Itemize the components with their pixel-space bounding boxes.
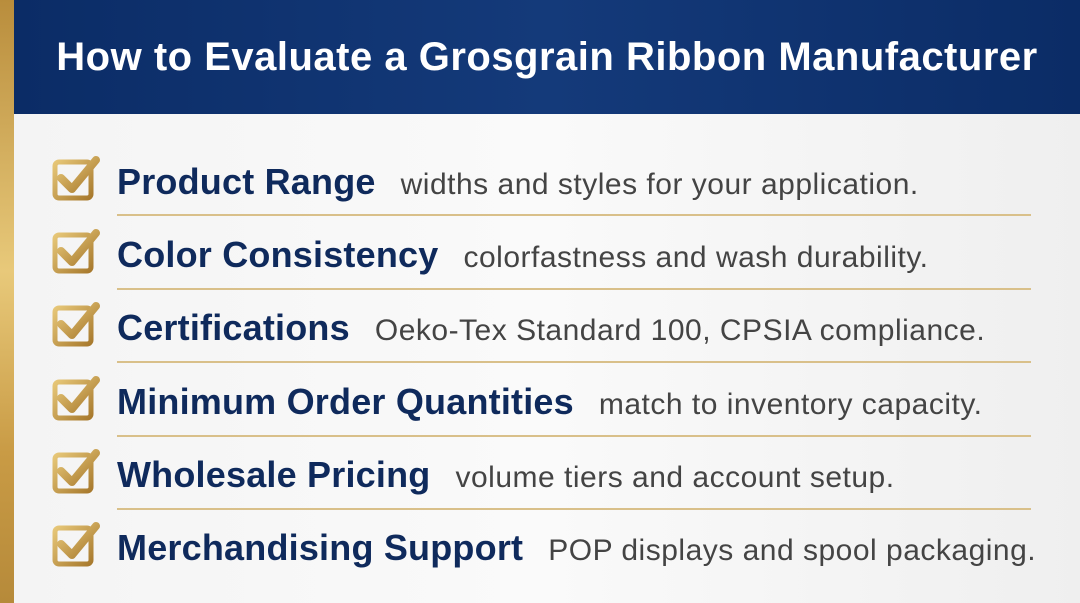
row: certifications: Certifications Oeko-Tex Standard 100, CPSIA compliance. <box>117 307 985 348</box>
gold side bar <box>0 0 14 603</box>
title <box>14 0 1080 114</box>
title: How to Evaluate a Grosgrain Ribbon Manufacturer <box>56 35 1038 79</box>
row: minimum order quantities: Minimum Order Quantities match to inventory capacity. <box>117 381 982 422</box>
row: product range: Product Range widths and styles for your application. <box>117 161 919 202</box>
row: merchandising support: Merchandising Support POP displays and spool packaging. <box>117 527 1036 568</box>
row: color consistency: Color Consistency colorfastness and wash durability. <box>117 234 928 275</box>
row: wholesale pricing: Wholesale Pricing volume tiers and account setup. <box>117 454 895 495</box>
